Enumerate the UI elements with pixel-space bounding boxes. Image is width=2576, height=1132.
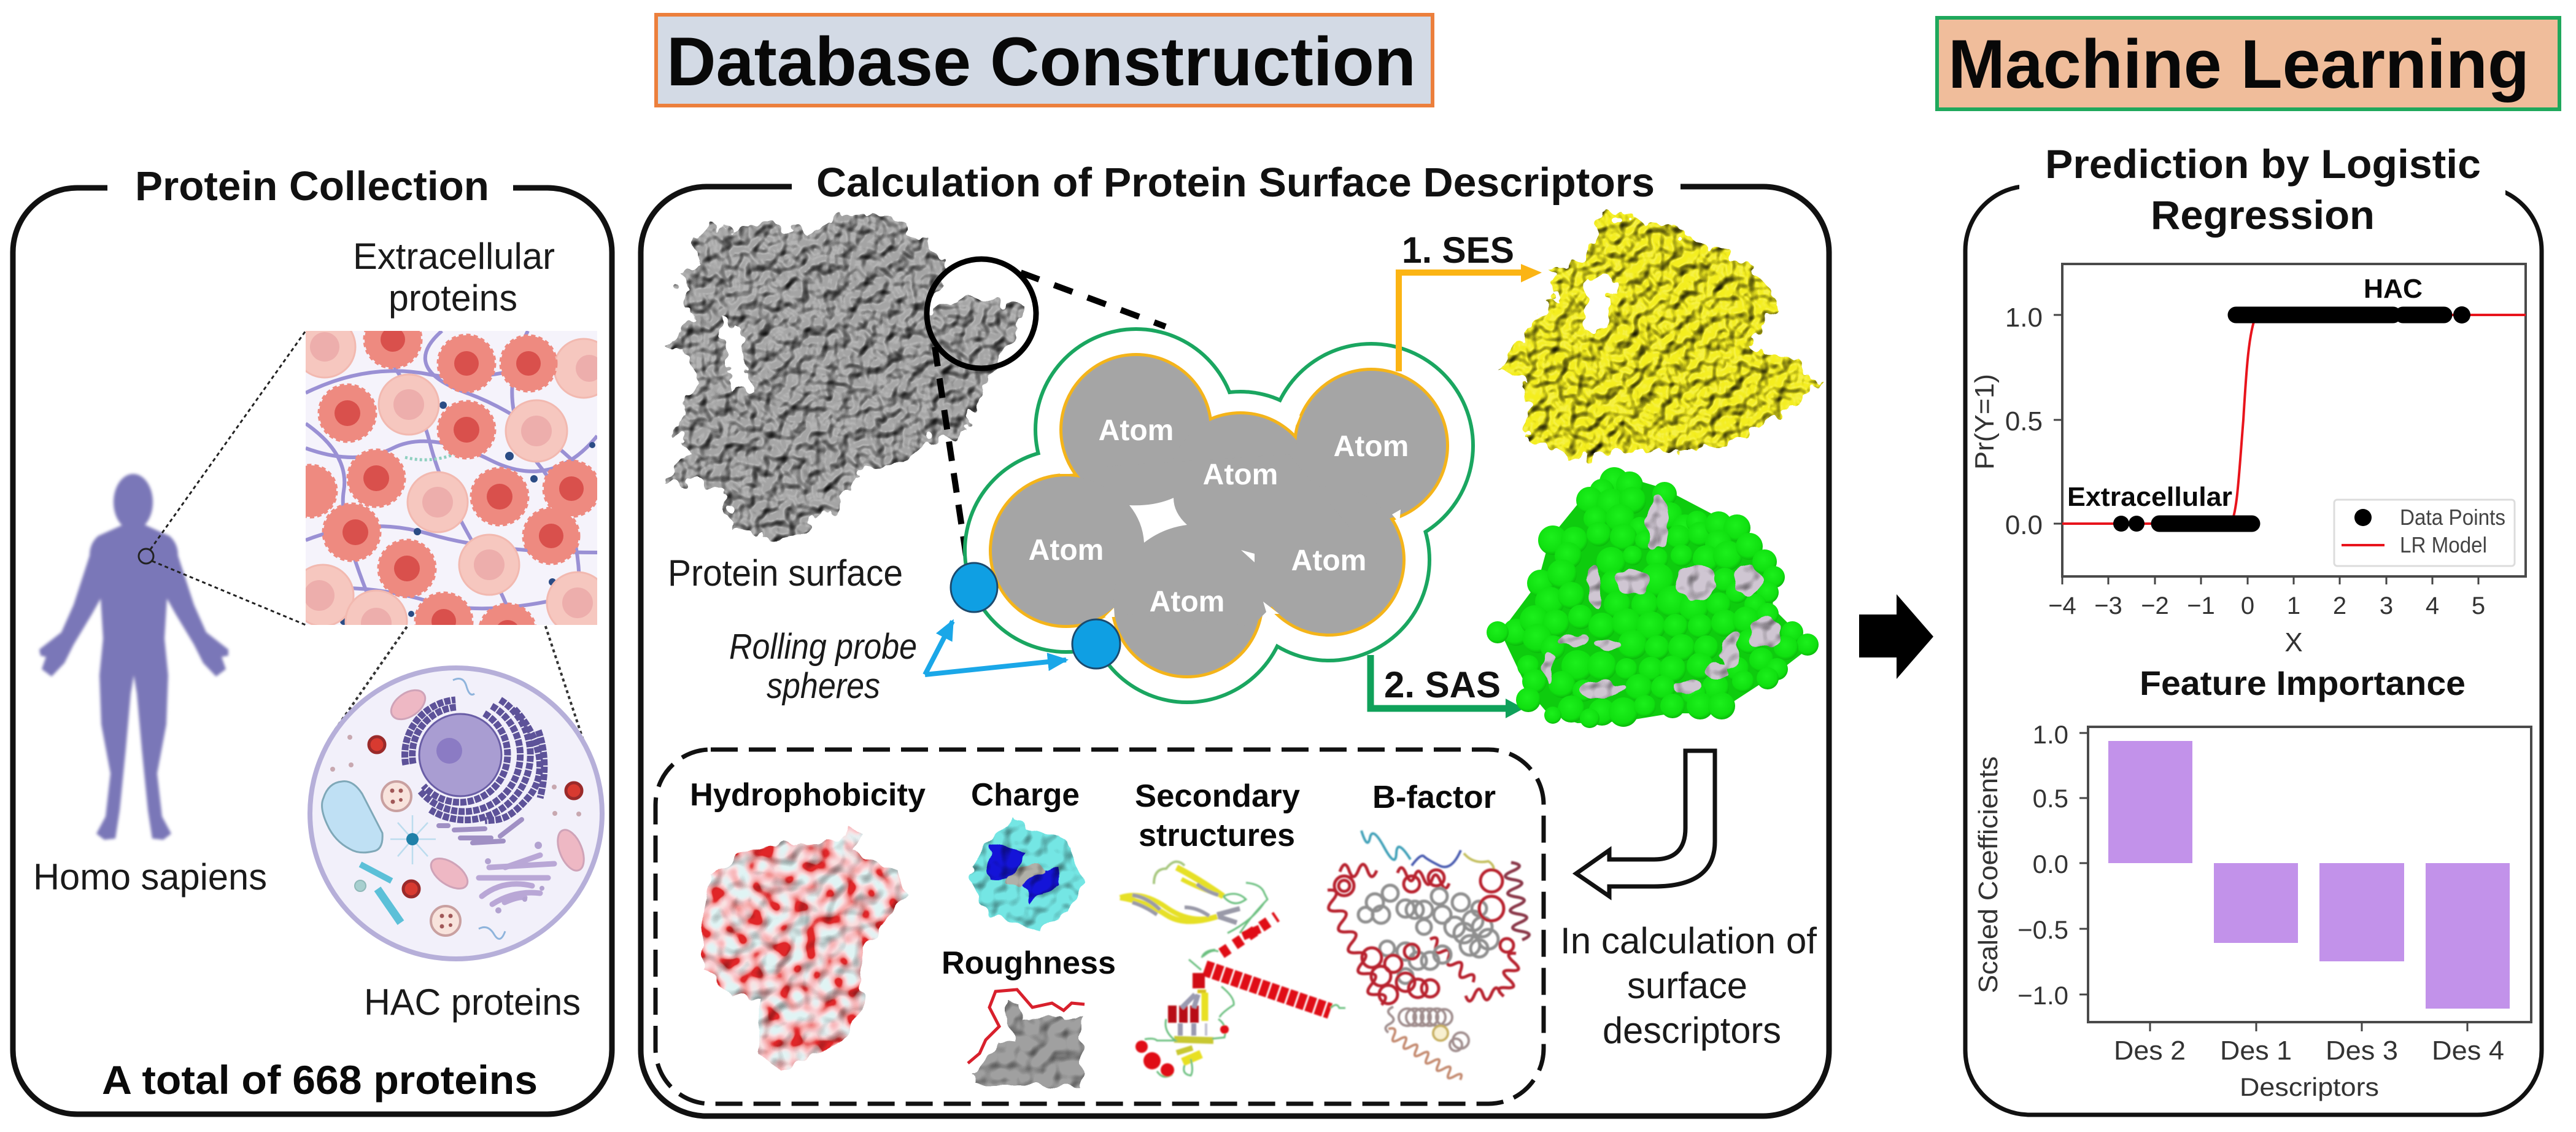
x axis labels: 4 [2426, 592, 2439, 619]
label: rolling probe spheres [729, 627, 917, 706]
protein: hydrophobicity [704, 826, 905, 1072]
y tick labels: 1.0 [2033, 720, 2068, 749]
atom labels: Atom [1099, 414, 1174, 447]
class labels: HAC [2364, 274, 2423, 304]
label: HAC proteins: HAC proteins [364, 982, 581, 1023]
data points [2113, 306, 2470, 532]
labels: descriptor names: Roughness [942, 945, 1116, 981]
exposed grey patches [1544, 496, 1782, 697]
legend [2334, 500, 2515, 566]
panel: protein collection [13, 163, 613, 1114]
atom labels: Atom [1291, 545, 1366, 577]
arrows: probe pointers [925, 621, 1066, 675]
x axis labels: 2 [2333, 592, 2346, 619]
arrow: SES: 1. SES [1402, 230, 1514, 271]
y tick labels: 0.0 [2033, 850, 2068, 878]
protein surface: green SAS [1487, 467, 1819, 728]
text: in calculation of surface descriptors: descriptors [1603, 1010, 1781, 1051]
x axis labels: −2 [2141, 592, 2169, 619]
x tick labels [2114, 1036, 2504, 1101]
x tick labels: Des 4 [2432, 1036, 2504, 1066]
labels: descriptor names [690, 777, 1496, 981]
zoom circle and dashed lines [927, 259, 1166, 556]
label: extracellular proteins: Extracellular [353, 236, 555, 277]
panel: calculation of protein surface descriptors [641, 160, 1829, 1116]
y tick labels: 0.5 [2033, 784, 2068, 813]
cell nucleus and endoplasmic reticulum [405, 700, 544, 843]
x axis labels: −1 [2187, 592, 2215, 619]
arrow: to machine learning [1859, 594, 1933, 679]
protein surface: grey [665, 212, 1025, 540]
lysosomes [382, 781, 460, 936]
panel: prediction by logistic regression [1965, 132, 2542, 1115]
x axis labels: 1 [2287, 592, 2300, 619]
atom labels: Atom [1334, 430, 1409, 463]
class labels: Extracellular [2067, 482, 2232, 512]
labels: descriptor names: Hydrophobicity [690, 777, 926, 813]
heading: prediction by logistic regression: Regression [2151, 192, 2375, 238]
atom labels: Atom [1029, 534, 1104, 567]
x tick labels: Des 2 [2114, 1036, 2186, 1066]
mitochondria [386, 684, 589, 894]
label: total proteins: A total of 668 proteins [102, 1057, 538, 1103]
label: rolling probe spheres: Rolling probe [729, 627, 917, 667]
header: Database Construction: Database Construction [667, 23, 1416, 100]
text: in calculation of surface descriptors: surface [1627, 965, 1747, 1006]
centrosome [390, 815, 436, 864]
label: Homo sapiens: Homo sapiens [33, 856, 267, 897]
heading: feature importance: Feature Importance [2140, 664, 2466, 702]
x axis labels: X [2284, 627, 2303, 657]
y tick labels: 0.5 [2005, 406, 2043, 436]
cavity shapes between atoms [1060, 416, 1401, 617]
class labels [2067, 274, 2423, 512]
label: rolling probe spheres: spheres [767, 666, 880, 706]
y tick labels: −1.0 [2017, 981, 2068, 1010]
legend: LR Model [2400, 532, 2487, 557]
rolling probe spheres [951, 563, 1120, 669]
chart: logistic regression curve [1970, 264, 2526, 657]
illustration: extracellular tissue [306, 331, 597, 625]
heading: protein collection: Protein Collection [135, 163, 489, 209]
arrow: SAS [1371, 655, 1524, 718]
atom labels: Atom [1150, 586, 1224, 618]
labels: descriptor names: Secondary [1135, 778, 1300, 814]
x tick labels: Des 3 [2326, 1036, 2398, 1066]
secondary structures ribbon [1120, 862, 1345, 1077]
icon: human silhouette [39, 474, 228, 840]
vacuole [322, 781, 382, 853]
golgi apparatus [479, 855, 554, 904]
y axis label: Scaled Coefficients [1973, 756, 2003, 993]
x tick labels: Descriptors [2240, 1072, 2379, 1101]
panel: surface descriptors dashed box [656, 750, 1544, 1104]
text: in calculation of surface descriptors [1560, 920, 1817, 1051]
labels: descriptor names: Charge [971, 777, 1080, 813]
x tick labels: Des 1 [2220, 1036, 2292, 1066]
axis ticks [2079, 733, 2467, 1031]
y tick labels: 1.0 [2005, 303, 2043, 333]
roughness illustration [968, 990, 1085, 1085]
y tick labels [2017, 720, 2068, 1010]
icon: body location marker and zoom lines [139, 331, 586, 749]
red vesicles [369, 737, 582, 897]
x axis labels [2048, 592, 2485, 657]
header: Machine Learning: Machine Learning [1948, 26, 2529, 103]
x axis labels: 3 [2380, 592, 2393, 619]
x axis labels: −3 [2094, 592, 2122, 619]
x axis labels: 0 [2241, 592, 2254, 619]
illustration: cell with HAC proteins [310, 668, 602, 959]
label: extracellular proteins [353, 236, 555, 319]
y tick labels: 0.0 [2005, 510, 2043, 540]
x axis labels: −4 [2048, 592, 2076, 619]
labels: descriptor names: B-factor [1372, 780, 1496, 815]
model line [2062, 315, 2526, 524]
atom labels: Atom [1203, 459, 1278, 491]
teal rods [360, 864, 401, 923]
chart: feature importance bars [1973, 720, 2531, 1101]
B-factor coils [1328, 831, 1530, 1080]
label: protein surface: Protein surface [668, 552, 903, 594]
arrow: hollow bent arrow [1576, 751, 1715, 896]
bars [2108, 741, 2510, 1009]
protein surface: yellow SES [1498, 212, 1819, 459]
y axis label: Pr(Y=1) [1970, 374, 2000, 470]
x axis labels: 5 [2472, 592, 2485, 619]
heading: calculation: Calculation of Protein Surface Descriptors [816, 160, 1655, 206]
legend: Data Points [2400, 505, 2505, 530]
text: in calculation of surface descriptors: In calculation of [1560, 920, 1817, 961]
arrow: SAS: 2. SAS [1384, 664, 1501, 705]
atom labels [1029, 414, 1409, 618]
axis ticks [2054, 315, 2478, 584]
label: extracellular proteins: proteins [389, 277, 517, 319]
heading: prediction by logistic regression: Prediction by Logistic [2045, 141, 2481, 187]
y tick labels [2005, 303, 2043, 540]
labels: descriptor names: structures [1139, 818, 1295, 853]
arrow: SES [1399, 230, 1542, 371]
small vesicles and filaments [330, 679, 581, 939]
protein: charge [971, 816, 1082, 931]
diagram: atoms with SES and SAS outlines [951, 327, 1475, 704]
heading: prediction by logistic regression [2045, 141, 2481, 238]
y tick labels: −0.5 [2017, 915, 2068, 944]
